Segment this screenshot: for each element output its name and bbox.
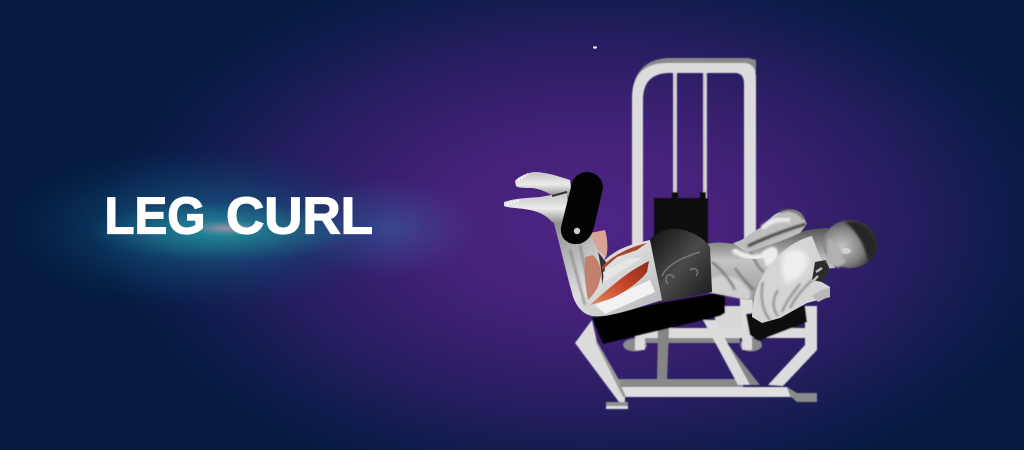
title: [104, 188, 373, 246]
calf muscles: [585, 230, 607, 300]
weight stack: [654, 192, 708, 260]
glutes with tattoo: [650, 229, 712, 302]
athlete figure: [504, 172, 877, 323]
torso and back: [700, 228, 835, 300]
head: [823, 220, 877, 268]
exercise machine: [575, 58, 817, 409]
title: LEG: [104, 188, 206, 246]
thigh pad: [592, 292, 725, 344]
hamstring muscles: [590, 243, 649, 305]
glow behind title: [0, 143, 480, 313]
base frame: [575, 298, 817, 409]
far arm: [733, 210, 807, 253]
title: CURL: [226, 188, 373, 246]
chest pad: [746, 306, 807, 341]
lower leg and thigh: [553, 220, 662, 316]
speck: [593, 46, 597, 49]
feet: [504, 172, 572, 224]
upright arch frame: [632, 58, 756, 247]
upper arm and forearm: [752, 236, 830, 323]
ankle roller pad: [561, 172, 603, 244]
